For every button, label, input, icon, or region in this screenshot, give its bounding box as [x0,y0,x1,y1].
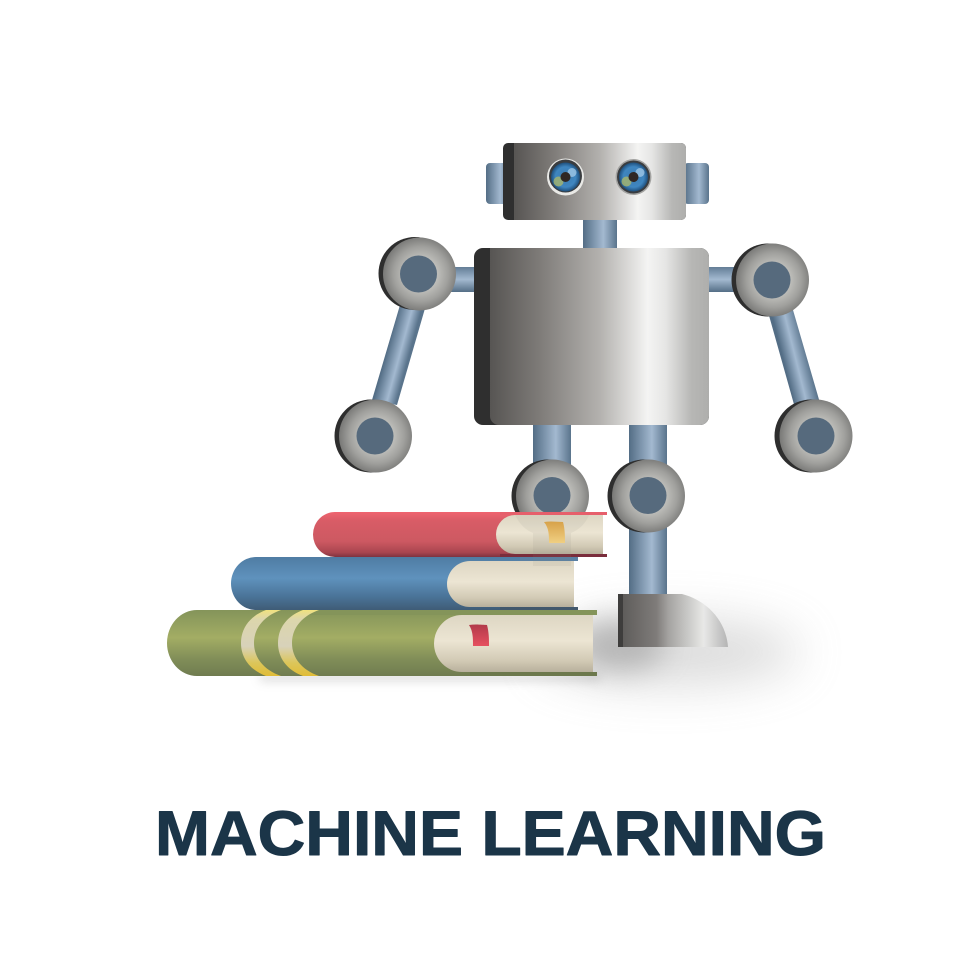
pages [496,515,603,554]
green book [167,610,597,676]
left ear [486,163,510,204]
red book [313,512,607,566]
neck [583,218,617,250]
foot [618,594,728,647]
book stack [167,512,607,676]
right knee [608,460,685,532]
title: MACHINE LEARNING [155,799,826,869]
left leg [533,423,571,483]
head [503,143,686,220]
red bookmark [469,625,489,646]
left arm [334,237,484,472]
right arm [705,244,852,472]
pages [447,561,574,607]
right eye [616,159,652,195]
spine band [278,610,319,676]
blue book [231,557,578,610]
left eye [547,158,584,196]
right ear [684,163,709,204]
spine band [241,610,281,676]
knee show-through [515,515,589,566]
yellow bookmark [544,522,565,543]
ground shadow [260,619,800,684]
pages [434,615,593,672]
body [474,248,709,425]
right leg [629,423,667,598]
robot [334,143,852,647]
left knee [512,460,589,532]
